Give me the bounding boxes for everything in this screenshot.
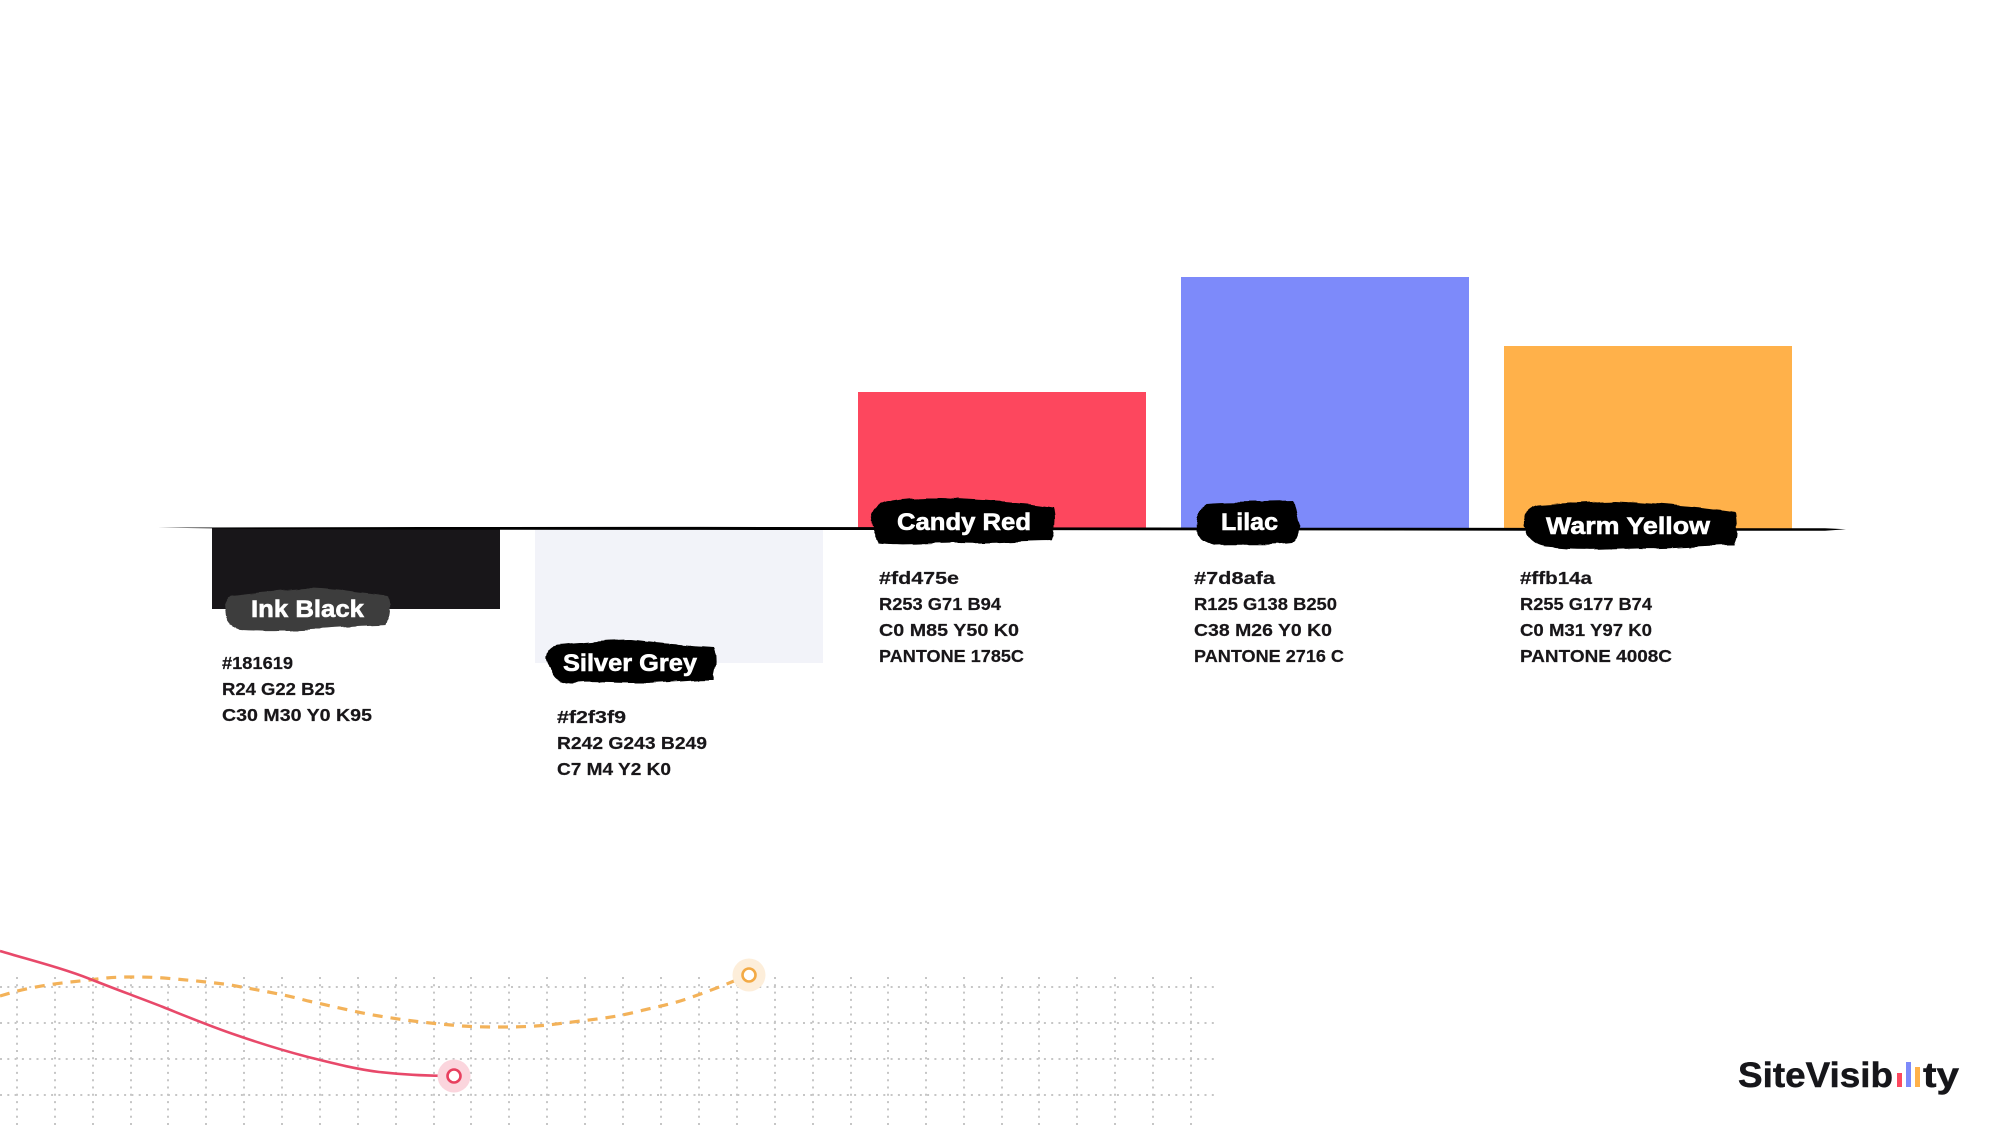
logo: SiteVisibility	[1738, 1056, 1960, 1095]
colour values: Ink Black: R24 G22 B25	[222, 679, 335, 699]
colour values: Silver Grey: #f2f3f9	[557, 707, 626, 727]
colour values: Candy Red: C0 M85 Y50 K0	[879, 620, 1019, 640]
label: Candy Red: Candy Red	[897, 509, 1031, 536]
red end marker	[438, 1060, 470, 1092]
logo: SiteVisibility: ty	[1923, 1056, 1960, 1095]
label: Warm Yellow: Warm Yellow	[1546, 513, 1711, 540]
bar: candy red	[858, 392, 1146, 529]
colour values: Ink Black: #181619	[222, 653, 293, 673]
bar: silver grey	[535, 529, 823, 663]
label: Warm Yellow	[1523, 501, 1737, 549]
colour values: Warm Yellow: C0 M31 Y97 K0	[1520, 620, 1652, 640]
label: Ink Black: Ink Black	[251, 596, 364, 623]
colour values: Warm Yellow: R255 G177 B74	[1520, 594, 1652, 614]
red curve	[0, 951, 454, 1076]
yellow end marker	[732, 958, 766, 992]
label: Candy Red	[871, 498, 1055, 544]
colour values: Lilac: C38 M26 Y0 K0	[1194, 620, 1332, 640]
label: Silver Grey	[546, 640, 716, 683]
colour values: Silver Grey: R242 G243 B249	[557, 733, 707, 753]
colour values: Candy Red: #fd475e	[879, 568, 959, 588]
bar: ink black	[212, 528, 500, 609]
colour values: Silver Grey	[557, 707, 707, 779]
colour values: Lilac: PANTONE 2716 C	[1194, 646, 1344, 666]
bar: lilac	[1181, 277, 1469, 529]
colour values: Lilac	[1194, 568, 1344, 666]
baseline axis	[158, 527, 1846, 531]
dashed yellow curve	[0, 975, 748, 1027]
label: Ink Black	[225, 588, 390, 631]
bar: warm yellow	[1504, 346, 1792, 529]
colour values: Ink Black: C30 M30 Y0 K95	[222, 705, 372, 725]
colour values: Lilac: #7d8afa	[1194, 568, 1275, 588]
label: Lilac: Lilac	[1221, 509, 1278, 536]
colour values: Warm Yellow: #ffb14a	[1520, 568, 1592, 588]
logo: SiteVisibility: SiteVisib	[1738, 1056, 1893, 1095]
colour values: Warm Yellow: PANTONE 4008C	[1520, 646, 1672, 666]
colour values: Lilac: R125 G138 B250	[1194, 594, 1337, 614]
colour values: Candy Red: R253 G71 B94	[879, 594, 1001, 614]
colour values: Ink Black	[222, 653, 372, 725]
colour values: Silver Grey: C7 M4 Y2 K0	[557, 759, 671, 779]
label: Lilac	[1197, 501, 1300, 545]
colour values: Warm Yellow	[1520, 568, 1672, 666]
colour values: Candy Red	[879, 568, 1024, 666]
colour values: Candy Red: PANTONE 1785C	[879, 646, 1024, 666]
label: Silver Grey: Silver Grey	[563, 650, 697, 677]
dotted grid	[0, 977, 1214, 1125]
